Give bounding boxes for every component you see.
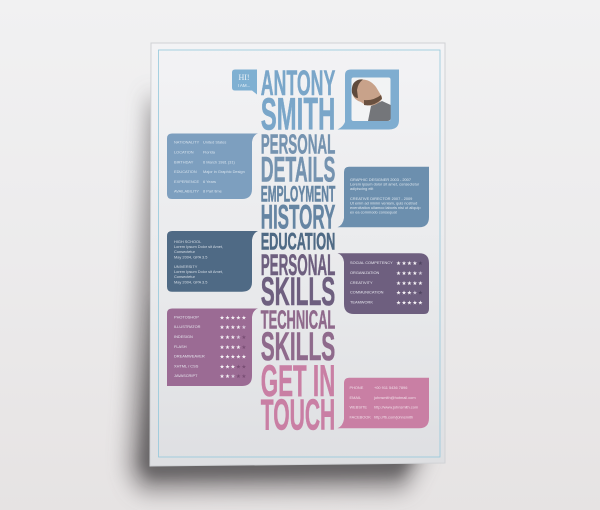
personal details rows: 8 Part time <box>203 188 222 194</box>
employment text: exercitation ullamco laboris nisi ut aliquip <box>350 205 420 210</box>
contact rows: http://fb.com/johnsmith <box>374 414 413 420</box>
personal skills rows <box>350 260 423 306</box>
personal skills rows: CREATIVITY <box>350 280 373 285</box>
technical skills rows: INDESIGN <box>174 334 193 339</box>
title: name <box>261 64 335 139</box>
resume content: GET IN <box>261 356 335 406</box>
personal details rows <box>174 140 245 194</box>
education text: Lorem Ipsum Dolor sit Amet, <box>174 269 223 274</box>
technical skills rows: XHTML / CSS <box>174 364 199 368</box>
personal details rows: United States <box>203 140 226 144</box>
personal skills panel <box>338 253 429 314</box>
personal skills rows: TEAMWORK <box>350 300 373 304</box>
contact rows: EMAIL <box>350 395 362 400</box>
education text: Consectetur <box>174 249 196 254</box>
resume content <box>167 64 429 439</box>
heading: personal details: DETAILS <box>261 151 335 190</box>
personal details rows: Florida <box>203 150 216 154</box>
technical skills rows: FLASH <box>174 344 187 349</box>
education text: May 2004, GPA 3.5 <box>174 254 207 260</box>
title: name: SMITH <box>261 88 335 139</box>
contact panel <box>338 378 429 428</box>
technical skills rows: PHOTOSHOP <box>174 314 199 320</box>
personal details rows: 6 Years <box>203 179 216 184</box>
education text: Lorem Ipsum Dolor sit Amet, <box>174 244 223 249</box>
employment text: GRAPHIC DESIGNER 2003 - 2007 <box>350 177 411 182</box>
employment text <box>350 177 420 214</box>
technical skills rows: ★★★★★ <box>220 373 247 380</box>
heading: technical skills <box>261 304 335 369</box>
resume content: HISTORY <box>261 198 335 236</box>
employment text: Ut enim ad minim veniam, quis nostrud <box>350 200 417 206</box>
technical skills rows <box>174 314 247 380</box>
personal skills rows: ★★★★★ <box>396 260 423 267</box>
education text: Consectetur <box>174 274 196 279</box>
resume content: TECHNICAL <box>261 304 335 334</box>
heading: personal skills: SKILLS <box>261 270 335 314</box>
employment text: CREATIVE DIRECTOR 2007 - 2009 <box>350 196 412 201</box>
technical skills rows: ★★★★★ <box>220 324 247 331</box>
personal details rows: NATIONALITY <box>174 140 200 144</box>
technical skills rows: ★★★★★ <box>220 354 247 360</box>
personal skills rows: ★★★★★ <box>396 270 423 277</box>
contact rows: http://www.johnsmith.com <box>374 404 418 410</box>
employment panel <box>338 167 429 227</box>
resume content: EMPLOYMENT <box>261 182 336 207</box>
heading: get in touch <box>261 356 335 439</box>
contact rows: +00 911 5436 7896 <box>374 385 407 390</box>
personal details rows: EXPERIENCE <box>174 179 199 184</box>
personal skills rows: ORGANIZATION <box>350 270 380 275</box>
heading: education: EDUCATION <box>261 228 335 255</box>
portrait <box>352 79 391 121</box>
heading: personal skills <box>261 249 335 314</box>
contact rows: WEBSITE <box>350 404 367 410</box>
personal details rows: EDUCATION <box>174 169 197 174</box>
photo frame <box>352 78 390 121</box>
photo bubble <box>338 70 399 130</box>
education text: May 2004, GPA 3.5 <box>174 280 207 284</box>
heading: technical skills: SKILLS <box>261 325 335 369</box>
heading: personal details <box>261 128 335 190</box>
technical skills rows: ILLUSTRATOR <box>174 324 201 329</box>
education text <box>174 239 223 284</box>
title: name: ANTONY <box>261 64 335 103</box>
personal skills rows: ★★★★★ <box>396 300 423 306</box>
employment text: adipiscing elit <box>350 186 374 191</box>
heading: employment history <box>261 182 336 236</box>
personal details rows: Major in Graphic Design <box>203 169 245 174</box>
greeting bubble: I AM... <box>238 83 250 88</box>
technical skills rows: ★★★★★ <box>220 314 247 322</box>
resume sheet <box>150 43 445 466</box>
contact rows: FACEBOOK <box>350 414 371 420</box>
technical skills rows: ★★★★★ <box>220 334 247 341</box>
personal details rows: 6 March 1981 (31) <box>203 160 235 164</box>
personal skills rows: COMMUNICATION <box>350 290 384 294</box>
personal skills rows: SOCIAL COMPETENCY <box>350 260 393 265</box>
resume content: PERSONAL <box>261 128 335 159</box>
technical skills rows: DREAMWEAVER <box>174 354 205 358</box>
contact rows: johnsmith@hotmail.com <box>373 395 416 400</box>
personal details panel <box>167 134 258 199</box>
personal skills rows: ★★★★★ <box>396 280 423 287</box>
personal details rows: LOCATION <box>174 150 194 154</box>
personal details rows: AVAILABILITY <box>174 188 199 194</box>
page shadow <box>128 90 425 492</box>
personal skills rows: ★★★★★ <box>396 290 423 296</box>
education panel <box>167 231 258 292</box>
employment text: ex ea commodo consequat <box>350 210 398 214</box>
resume content: PERSONAL <box>261 249 335 282</box>
contact rows <box>350 385 418 420</box>
personal details rows: BIRTHDAY <box>174 160 194 164</box>
education text: UNIVERSITY <box>174 264 198 269</box>
education text: HIGH SCHOOL <box>174 239 202 244</box>
employment text: Lorem ipsum dolor sit amet, consectetur <box>350 182 420 186</box>
resume content: TOUCH <box>261 390 335 439</box>
contact rows: PHONE <box>350 385 364 390</box>
greeting bubble: HI! <box>238 73 250 82</box>
technical skills rows: ★★★★★ <box>220 344 247 351</box>
technical skills rows: ★★★★★ <box>220 364 247 370</box>
technical skills rows: JAVASCRIPT <box>174 373 198 378</box>
greeting bubble <box>232 70 257 94</box>
technical skills panel <box>167 308 258 386</box>
